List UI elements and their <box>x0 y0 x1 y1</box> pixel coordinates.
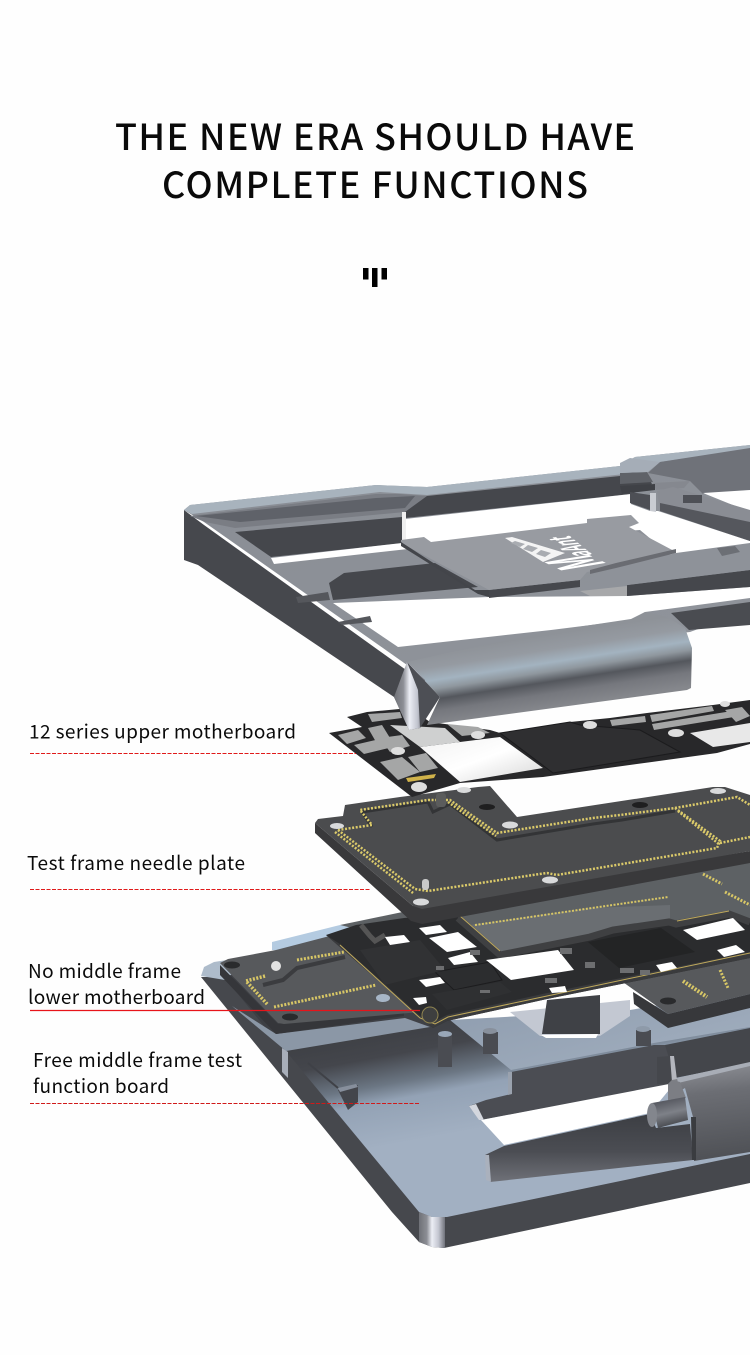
lower window <box>333 587 750 647</box>
centre plate <box>489 580 580 598</box>
silver shield <box>420 737 543 782</box>
ledge wall <box>469 1045 669 1120</box>
icon: brand logo <box>363 268 387 287</box>
label: no middle frame lower motherboard <box>28 957 420 1010</box>
locating pins <box>438 1026 651 1067</box>
rail studs <box>296 592 330 603</box>
left window <box>235 517 404 557</box>
frame side face <box>184 510 420 730</box>
lower slot wall <box>485 1114 693 1182</box>
needle dots <box>335 797 750 893</box>
lower needle plate, right <box>620 950 750 1028</box>
clamp pin <box>652 1097 688 1128</box>
chips <box>435 962 502 990</box>
label: free middle frame test function board: function board <box>33 1072 169 1099</box>
title: COMPLETE FUNCTIONS <box>162 157 588 209</box>
title <box>115 109 635 209</box>
lower motherboard <box>326 911 750 1028</box>
screws <box>391 701 730 792</box>
middle plate <box>340 860 750 960</box>
post behind clamp <box>657 1056 674 1084</box>
clamp block <box>668 1063 750 1161</box>
screws and holes <box>330 787 726 906</box>
plate logo and QR code <box>505 535 626 576</box>
base plate <box>201 958 750 1248</box>
cross bar right wall <box>627 570 750 596</box>
black chip <box>500 722 680 773</box>
small parts <box>436 948 650 993</box>
label: test frame needle plate: Test frame needle plate <box>27 849 245 876</box>
centre pocket <box>510 1000 630 1036</box>
connectors <box>338 706 750 780</box>
top frame <box>184 445 750 730</box>
white slot <box>481 1084 669 1145</box>
needle plate <box>315 786 750 924</box>
lower needle plate, left <box>220 925 420 1034</box>
right ledge <box>450 990 750 1070</box>
top rim highlight <box>184 445 750 514</box>
label: 12 series upper motherboard: 12 series upper motherboard <box>29 718 296 744</box>
frame top surface <box>184 445 750 665</box>
cross bar wall <box>329 563 478 600</box>
upper motherboard <box>329 700 750 797</box>
left ledge <box>232 1006 430 1051</box>
pocket shadow <box>362 802 675 840</box>
label: free middle frame test function board: Free middle frame test <box>33 1046 242 1073</box>
plate logo and QR code: M <box>517 551 626 576</box>
windows <box>400 494 750 560</box>
upper right wall <box>648 448 750 494</box>
board frame rim <box>326 935 750 1028</box>
left end recess <box>190 494 427 528</box>
handle <box>407 612 692 725</box>
right rail <box>657 487 750 540</box>
right bar top <box>580 543 750 586</box>
recess notch <box>308 1063 338 1088</box>
label: free middle frame test function board <box>30 1046 419 1104</box>
label: no middle frame lower motherboard: No middle frame <box>28 957 181 984</box>
white components <box>385 918 745 1005</box>
plate logo and QR code: aAnt <box>534 535 602 558</box>
title: THE NEW ERA SHOULD HAVE <box>115 109 635 161</box>
label: no middle frame lower motherboard: lower motherboard <box>28 983 205 1010</box>
block by corner <box>630 492 650 510</box>
top rail wall <box>405 473 652 518</box>
panel: exploded fixture illustration <box>184 445 750 1248</box>
right white shield <box>690 723 750 747</box>
